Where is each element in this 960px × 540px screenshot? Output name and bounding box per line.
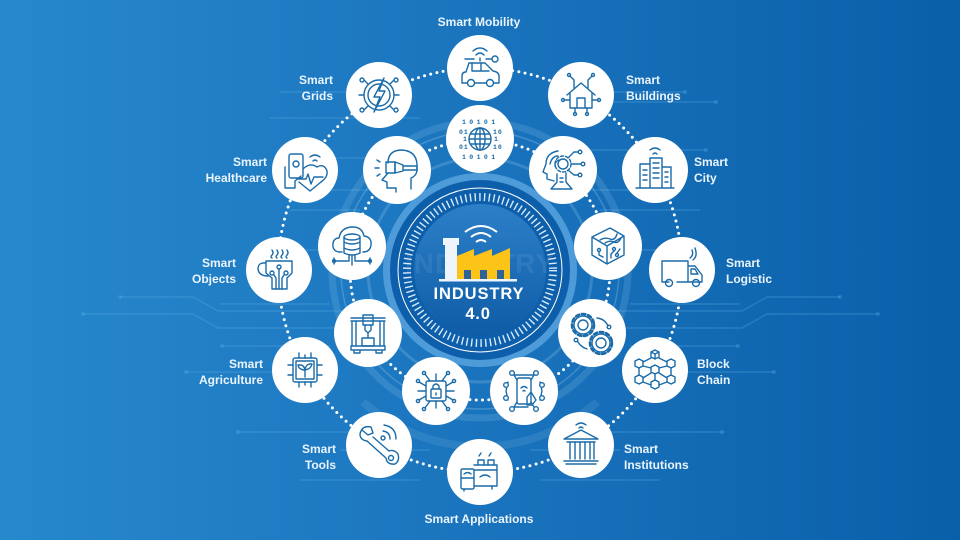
- label: Smart Objects: [192, 256, 236, 286]
- node: 3D printer: [334, 299, 402, 367]
- label: Smart Buildings: [626, 73, 681, 103]
- node: binary globe: 01: [459, 144, 469, 151]
- label: Smart City: City: [694, 171, 717, 185]
- icon: factory: [439, 226, 517, 282]
- label: Smart City: Smart: [694, 155, 728, 169]
- node: Smart Grids: [346, 62, 412, 128]
- label: Smart Grids: [299, 73, 333, 103]
- label: Smart Buildings: Smart: [626, 73, 660, 87]
- node: binary globe: 10: [493, 144, 503, 151]
- node: binary globe: 1: [463, 136, 467, 143]
- dotted inner ring: [350, 140, 610, 400]
- label: Smart Agriculture: Smart: [229, 357, 263, 371]
- node: smart cube: [574, 212, 642, 280]
- circuit lines background: [83, 92, 878, 480]
- label: Block Chain: Chain: [697, 373, 730, 387]
- node: Smart Institutions: [548, 412, 614, 478]
- node: binary globe: 10: [493, 129, 503, 136]
- label: Block Chain: Block: [697, 357, 730, 371]
- decorative tech rings: [332, 122, 628, 447]
- node: binary globe: 1: [494, 136, 498, 143]
- label: Smart Institutions: Institutions: [624, 458, 689, 472]
- label: Smart Logistic: Smart: [726, 256, 760, 270]
- node: Smart Agriculture: [272, 337, 338, 403]
- node: gears: [558, 299, 626, 367]
- label: Smart Grids: Smart: [299, 73, 333, 87]
- label: Smart Mobility: Smart Mobility: [438, 15, 521, 29]
- node: Smart Objects: [246, 237, 312, 303]
- node: security chip: [402, 357, 470, 425]
- label: Smart City: [694, 155, 728, 185]
- label: Smart Objects: Objects: [192, 272, 236, 286]
- node: cloud data: [318, 212, 386, 280]
- label: Block Chain: [697, 357, 730, 387]
- label: Smart Logistic: [726, 256, 772, 286]
- node: Smart City: [622, 137, 688, 203]
- label: Smart Buildings: Buildings: [626, 89, 681, 103]
- node: Smart Applications: [447, 439, 513, 505]
- label: Smart Tools: [302, 442, 336, 472]
- label: Smart Agriculture: Agriculture: [199, 373, 263, 387]
- node: Smart Buildings: [548, 62, 614, 128]
- label: Smart Applications: Smart Applications: [425, 512, 534, 526]
- node: binary globe: 10101: [462, 154, 499, 161]
- hub title: INDUSTRY: [434, 285, 524, 303]
- label: Smart Objects: Smart: [202, 256, 236, 270]
- central hub: [383, 173, 577, 367]
- dotted outer ring: [278, 68, 682, 472]
- node: Block Chain: [622, 337, 688, 403]
- faint word behind the logo: INDUSTRY: [405, 248, 555, 279]
- node: binary globe: [446, 105, 514, 173]
- label: Smart Institutions: [624, 442, 689, 472]
- node: binary globe: 10101: [462, 119, 499, 126]
- label: Smart Agriculture: [199, 357, 263, 387]
- hub subtitle: 4.0: [465, 305, 491, 323]
- label: Smart Tools: Tools: [305, 458, 336, 472]
- label: Smart Tools: Smart: [302, 442, 336, 456]
- node: Smart Healthcare: [272, 137, 338, 203]
- node: phone network: [490, 357, 558, 425]
- label: Smart Healthcare: Healthcare: [206, 171, 267, 185]
- node: Smart Mobility: [447, 35, 513, 101]
- label: Smart Grids: Grids: [302, 89, 333, 103]
- node: binary globe: 01: [459, 129, 469, 136]
- node: Smart Logistic: [649, 237, 715, 303]
- node: AI head: [529, 136, 597, 204]
- node: VR headset: [363, 136, 431, 204]
- label: Smart Institutions: Smart: [624, 442, 658, 456]
- node: Smart Tools: [346, 412, 412, 478]
- label: Smart Logistic: Logistic: [726, 272, 772, 286]
- label: Smart Healthcare: [206, 155, 267, 185]
- label: Smart Healthcare: Smart: [233, 155, 267, 169]
